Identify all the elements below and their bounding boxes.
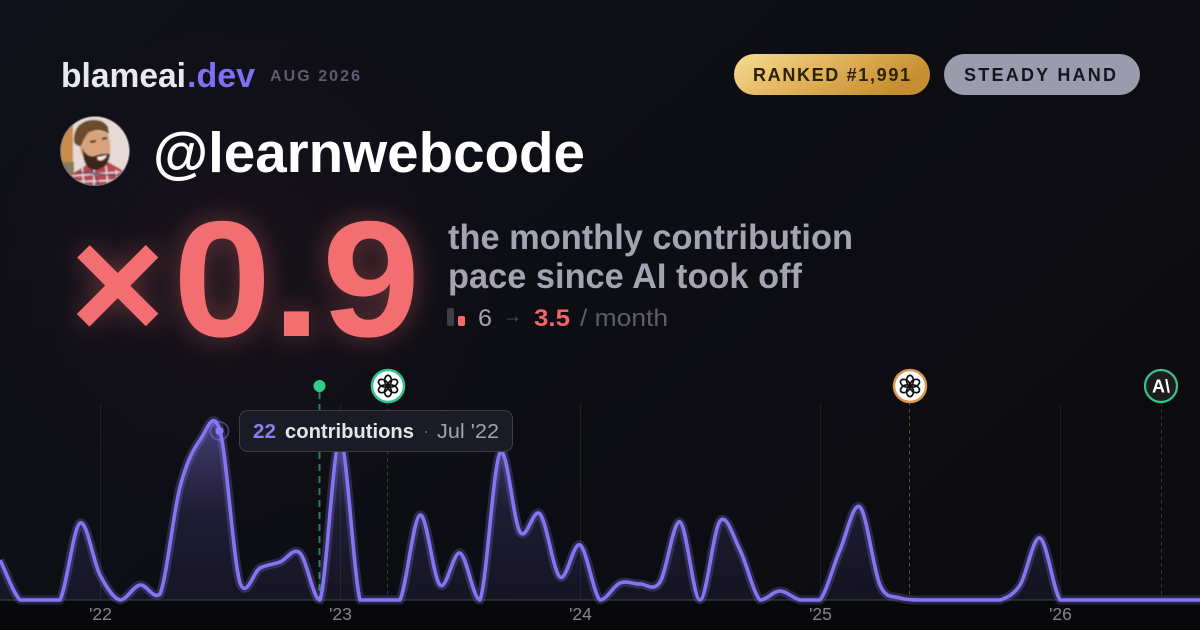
face [78, 130, 111, 161]
marker: Anthropic: A\ [1152, 376, 1170, 396]
pace comparison: 6 [478, 305, 492, 332]
brand logo: blameai [61, 57, 186, 95]
multiplier glow: × [70, 192, 165, 375]
area fill [0, 421, 1200, 600]
multiplier: × [70, 192, 165, 375]
marker line: first green [318, 392, 320, 600]
description: the monthly contribution [448, 218, 853, 257]
pace comparison: → [503, 306, 522, 328]
multiplier: 0.9 [173, 187, 420, 372]
pace comparison: / month [580, 305, 668, 332]
brand logo [61, 57, 255, 95]
marker line: second green [386, 402, 388, 600]
peak dot [210, 422, 228, 440]
hair [74, 120, 109, 146]
brand logo: .dev [187, 57, 255, 95]
multiplier glow [70, 187, 420, 375]
tooltip: contributions [285, 421, 414, 443]
marker: green dot [314, 380, 326, 392]
chart [0, 392, 1200, 624]
pace comparison: 3.5 [534, 305, 570, 332]
marker: OpenAI green [372, 370, 404, 402]
marker line: orange [908, 402, 910, 600]
shirt [71, 161, 123, 185]
badge: archetype: STEADY HAND [964, 65, 1116, 85]
tooltip: Jul '22 [437, 421, 499, 443]
year labels: '23 [329, 604, 352, 624]
contribution line [0, 421, 1200, 600]
year labels: '24 [569, 604, 592, 624]
marker: OpenAI orange [894, 370, 926, 402]
date label: AUG 2026 [270, 68, 360, 85]
avatar [60, 116, 130, 186]
mini bars [447, 308, 465, 326]
username: @learnwebcode [153, 121, 585, 185]
axis line [0, 599, 1200, 601]
year labels [89, 604, 1072, 624]
line halo [0, 421, 1200, 600]
marker line: third green [1160, 402, 1162, 600]
description [448, 218, 853, 296]
year labels: '22 [89, 604, 112, 624]
badge: archetype [944, 54, 1140, 95]
year labels: '25 [809, 604, 832, 624]
multiplier [70, 187, 420, 375]
marker: Anthropic [1145, 370, 1177, 402]
description: pace since AI took off [448, 257, 802, 296]
tooltip [240, 410, 512, 452]
tooltip: · [423, 421, 429, 441]
tooltip: 22 [253, 421, 276, 443]
badge: rank [734, 54, 930, 95]
badge: rank: RANKED #1,991 [753, 65, 910, 85]
beard [82, 148, 110, 170]
year labels: '26 [1049, 604, 1072, 624]
pace comparison [447, 305, 668, 332]
year gridlines [100, 403, 1060, 600]
multiplier glow: 0.9 [173, 187, 420, 372]
